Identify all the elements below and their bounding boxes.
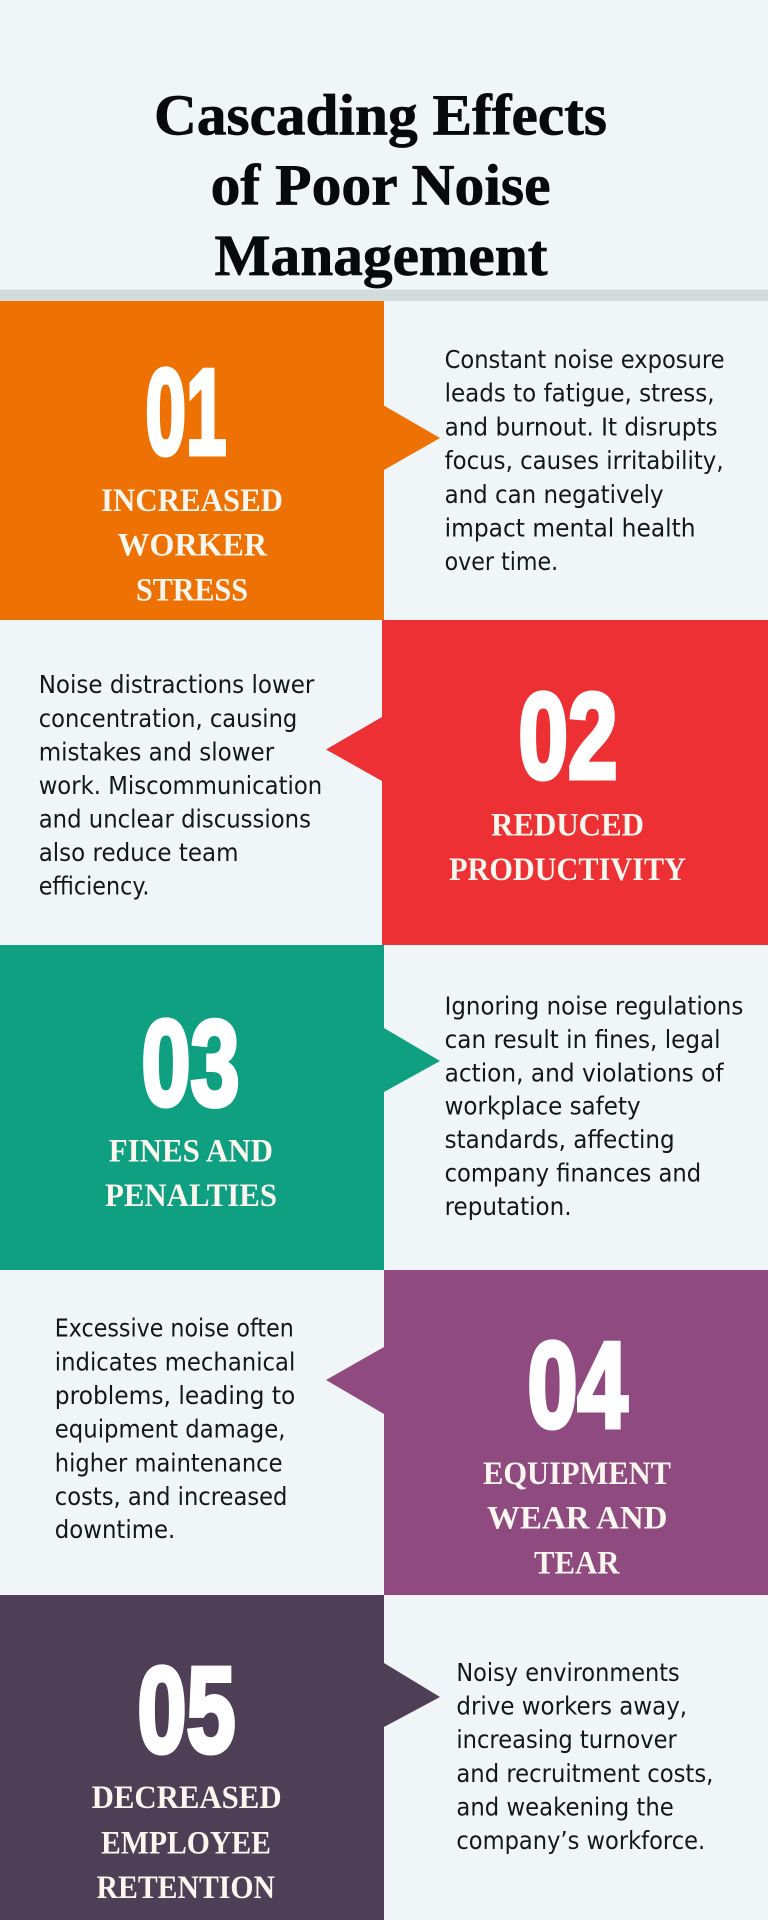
panel shape with arrow — [0, 945, 440, 1270]
heading: INCREASED — [101, 483, 283, 519]
number 02: 02 — [518, 668, 618, 804]
description: and weakening the — [456, 1793, 674, 1822]
description: indicates mechanical — [55, 1347, 295, 1376]
panel shape with arrow — [326, 1270, 768, 1595]
heading: PRODUCTIVITY — [449, 852, 686, 888]
description: increasing turnover — [456, 1725, 678, 1754]
number 01: 01 — [146, 344, 226, 480]
heading: TEAR — [534, 1546, 621, 1582]
description — [55, 1314, 295, 1544]
description: equipment damage, — [55, 1415, 285, 1444]
description: standards, affecting — [445, 1125, 675, 1154]
title: of Poor Noise — [211, 153, 551, 218]
panel: 03 fines and penalties — [0, 945, 743, 1270]
description: Noise distractions lower — [39, 670, 315, 699]
heading: FINES AND — [109, 1134, 273, 1170]
description: company finances and — [445, 1159, 701, 1188]
number 05: 05 — [138, 1642, 236, 1778]
description: downtime. — [55, 1515, 175, 1544]
title: Cascading Effects — [154, 83, 607, 148]
heading: RETENTION — [96, 1870, 275, 1906]
description: can result in fines, legal — [445, 1025, 721, 1054]
heading: PENALTIES — [105, 1178, 277, 1214]
description — [39, 670, 322, 901]
description — [445, 991, 743, 1221]
heading — [483, 1456, 671, 1582]
description: concentration, causing — [39, 704, 297, 733]
description: over time. — [445, 547, 558, 576]
description: and can negatively — [445, 480, 664, 509]
description: impact mental health — [445, 513, 696, 542]
description: mistakes and slower — [39, 738, 275, 767]
number 04: 04 — [528, 1317, 628, 1453]
heading: EMPLOYEE — [101, 1825, 271, 1861]
title: Management — [214, 223, 548, 288]
panel shape with arrow — [0, 1595, 440, 1920]
heading: REDUCED — [491, 808, 644, 844]
description: higher maintenance — [55, 1448, 282, 1477]
description: workplace safety — [445, 1092, 641, 1121]
description: also reduce team — [39, 838, 239, 867]
description: and burnout. It disrupts — [445, 412, 718, 441]
panel: 04 equipment wear and tear — [55, 1270, 768, 1595]
heading — [101, 483, 283, 608]
description: focus, causes irritability, — [445, 446, 724, 475]
description: Excessive noise often — [55, 1314, 294, 1343]
description: Noisy environments — [456, 1658, 680, 1687]
description — [456, 1658, 713, 1855]
panel: 02 reduced productivity — [39, 620, 768, 945]
description: efficiency. — [39, 872, 149, 901]
description: company’s workforce. — [456, 1826, 705, 1855]
panel shape with arrow — [326, 620, 768, 945]
number 03: 03 — [142, 995, 240, 1131]
heading: EQUIPMENT — [483, 1456, 671, 1492]
heading — [105, 1134, 277, 1214]
description: drive workers away, — [456, 1692, 687, 1720]
description: Constant noise exposure — [445, 345, 725, 374]
heading: DECREASED — [92, 1780, 282, 1816]
description — [445, 345, 725, 576]
description: Ignoring noise regulations — [445, 991, 743, 1020]
description: leads to fatigue, stress, — [445, 379, 715, 408]
panel: 01 increased worker stress — [0, 301, 725, 620]
heading: STRESS — [136, 572, 248, 608]
heading: WEAR AND — [487, 1500, 668, 1536]
description: and unclear discussions — [39, 805, 311, 834]
panel shape with arrow — [0, 301, 440, 620]
description: and recruitment costs, — [456, 1759, 713, 1788]
panel: 05 decreased employee retention — [0, 1595, 713, 1920]
heading — [449, 808, 686, 888]
description: reputation. — [445, 1192, 572, 1221]
description: problems, leading to — [55, 1381, 295, 1410]
title — [154, 83, 607, 288]
description: costs, and increased — [55, 1482, 287, 1511]
description: work. Miscommunication — [39, 771, 322, 800]
description: action, and violations of — [445, 1058, 725, 1087]
heading: WORKER — [118, 528, 268, 564]
heading — [92, 1780, 282, 1906]
